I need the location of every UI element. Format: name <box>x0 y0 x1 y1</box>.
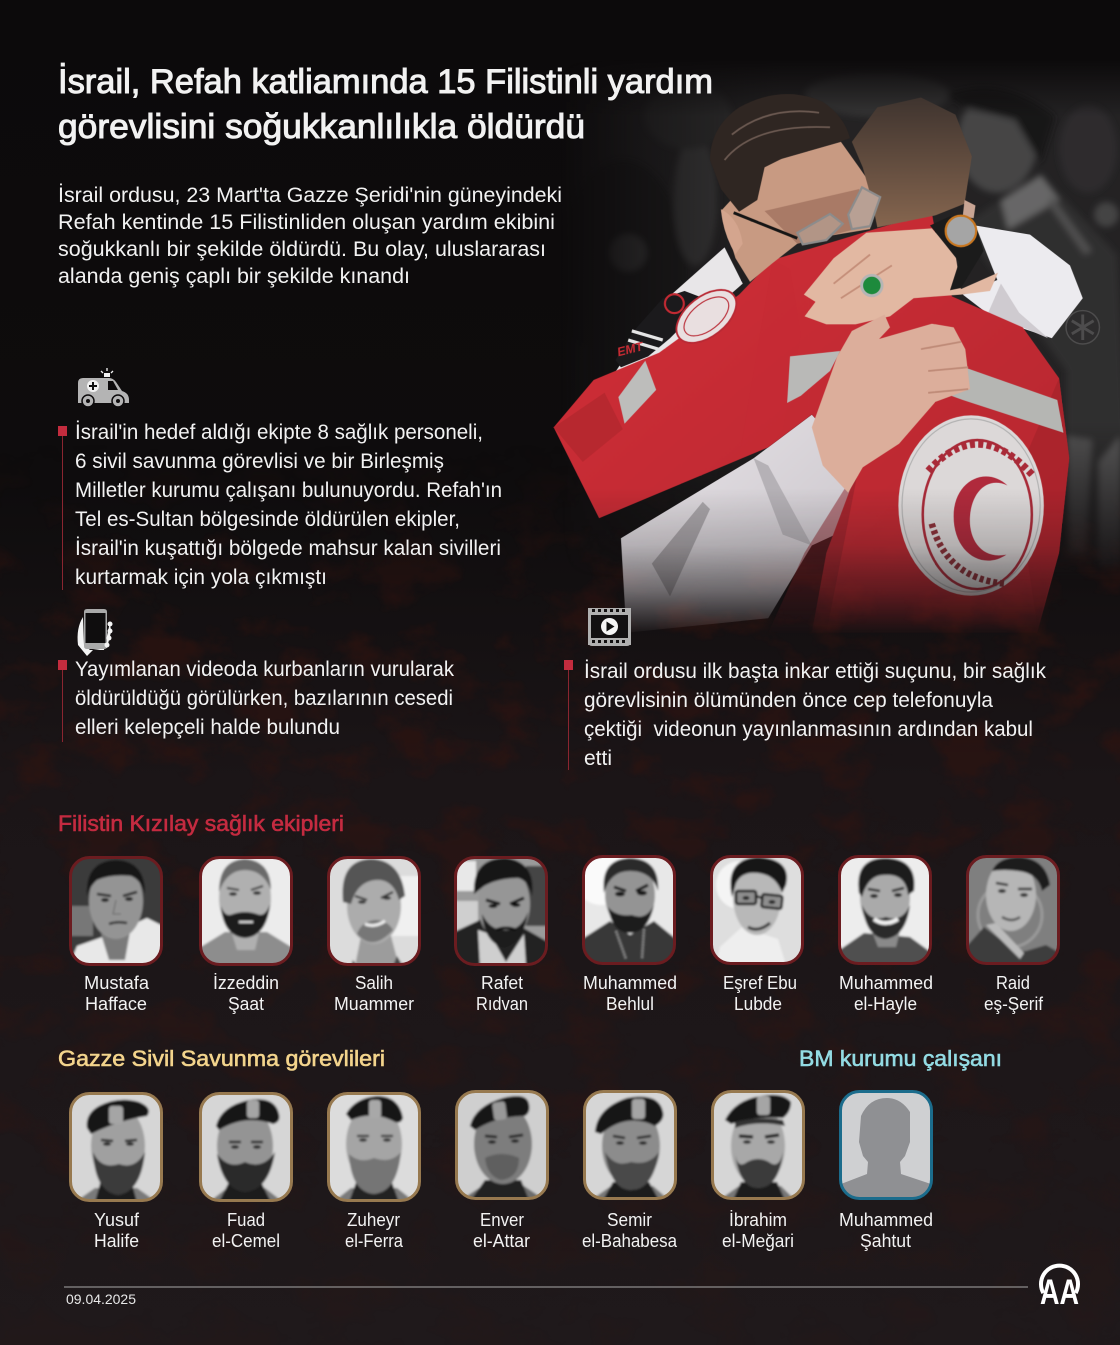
portrait: Zuheyr el-Ferra <box>327 1092 421 1202</box>
portrait: Fuad el-Cemel <box>199 1092 293 1202</box>
name: Mustafa Hafface: Mustafa <box>84 973 150 993</box>
name: Raid eş-Şerif: Raid <box>996 973 1030 993</box>
text block: video evidence <box>75 658 454 739</box>
photo: grey crowd background <box>610 74 1120 562</box>
photo: upper white sleeve <box>963 225 1083 338</box>
text block: target team <box>75 421 502 589</box>
intro paragraph: Refah kentinde 15 Filistinliden oluşan yardım ekibini <box>58 211 555 234</box>
text block: target team: Tel es-Sultan bölgesinde öldürülen ekipler, <box>75 508 460 531</box>
portrait: Muhammed Şahtut (placeholder silhouette) <box>839 1090 933 1200</box>
name: Yusuf Halife: Halife <box>94 1231 139 1251</box>
name: Fuad el-Cemel: el-Cemel <box>212 1231 280 1251</box>
name: İbrahim el-Meğari: İbrahim <box>729 1210 787 1230</box>
name: Muhammed Behlul: Muhammed <box>583 973 677 993</box>
name: İzzeddin Şaat <box>213 973 279 1014</box>
photo: reflective strips <box>787 351 840 403</box>
name: Salih Muammer <box>334 973 414 1014</box>
name: Salih Muammer: Muammer <box>334 994 414 1014</box>
photo: ring <box>862 275 882 296</box>
photo: man B head <box>852 97 972 227</box>
name: Muhammed el-Hayle <box>839 973 933 1014</box>
name: Semir el-Bahabesa: el-Bahabesa <box>582 1231 678 1251</box>
date: 09.04.2025 <box>66 1291 136 1307</box>
icon: ambulance <box>78 368 129 407</box>
bullet: video block marker <box>58 660 67 742</box>
intro paragraph: İsrail ordusu, 23 Mart'ta Gazze Şeridi'nin güneyindeki <box>58 184 562 207</box>
name: İbrahim el-Meğari <box>722 1210 794 1251</box>
name: Eşref Ebu Lubde <box>723 973 797 1014</box>
portrait: Muhammed el-Hayle <box>838 855 932 965</box>
name: Muhammed Şahtut: Şahtut <box>860 1231 911 1251</box>
title: görevlisini soğukkanlılıkla öldürdü <box>58 108 585 146</box>
portrait: Raid eş-Şerif <box>966 855 1060 965</box>
photo: man A hair <box>710 94 850 212</box>
name: Raid eş-Şerif <box>984 973 1044 1014</box>
photo: man A head <box>721 142 879 282</box>
logo: Anadolu Agency: AA <box>1040 1273 1079 1312</box>
photo: glasses <box>734 213 797 238</box>
name: Muhammed el-Hayle: Muhammed <box>839 973 933 993</box>
name: Eşref Ebu Lubde: Eşref Ebu <box>723 973 797 993</box>
photo: watch <box>930 216 983 290</box>
name: Fuad el-Cemel: Fuad <box>227 1210 265 1230</box>
text block: target team: 6 sivil savunma görevlisi ve bir Birleşmiş <box>75 450 444 473</box>
heading: UN employee: BM kurumu çalışanı <box>799 1046 1002 1071</box>
intro paragraph: alanda geniş çaplı bir şekilde kınandı <box>58 265 410 288</box>
name: Muhammed el-Hayle: el-Hayle <box>854 994 917 1014</box>
portrait: Mustafa Hafface <box>69 856 163 966</box>
photo: two main figures: EMT <box>616 339 646 359</box>
name: Zuheyr el-Ferra: el-Ferra <box>345 1231 404 1251</box>
photo: lower white sleeve <box>621 415 863 633</box>
name: Zuheyr el-Ferra <box>345 1210 404 1251</box>
name: Mustafa Hafface: Hafface <box>85 994 147 1014</box>
name: Yusuf Halife <box>94 1210 140 1251</box>
logo: Anadolu Agency <box>1040 1266 1079 1312</box>
title <box>58 63 713 146</box>
text block: admission: görevlisinin ölümünden önce cep telefonuyla <box>584 689 993 712</box>
intro paragraph <box>58 184 562 288</box>
name: Eşref Ebu Lubde: Lubde <box>734 994 782 1014</box>
name: Enver el-Attar: el-Attar <box>473 1231 530 1251</box>
name: Rafet Rıdvan: Rafet <box>481 973 523 993</box>
portrait: Muhammed Behlul <box>582 855 676 965</box>
name: Semir el-Bahabesa <box>582 1210 678 1251</box>
name: Muhammed Şahtut: Muhammed <box>839 1210 933 1230</box>
bullet: admission block marker <box>564 660 573 770</box>
name: Enver el-Attar <box>473 1210 530 1251</box>
name: Zuheyr el-Ferra: Zuheyr <box>347 1210 400 1230</box>
photo: upper hand <box>804 228 998 324</box>
intro paragraph: soğukkanlı bir şekilde öldürdü. Bu olay, uluslararası <box>58 238 546 261</box>
portrait: Semir el-Bahabesa <box>583 1090 677 1200</box>
text block: admission: İsrail ordusu ilk başta inkar ettiği suçunu, bir sağlık <box>584 660 1046 683</box>
name: İzzeddin Şaat: İzzeddin <box>213 973 279 993</box>
icon: film with play button <box>588 608 631 645</box>
text block: video evidence: elleri kelepçeli halde bulundu <box>75 716 340 739</box>
name: Rafet Rıdvan: Rıdvan <box>476 994 528 1014</box>
text block: video evidence: Yayımlanan videoda kurbanların vurularak <box>75 658 454 681</box>
photo: back crescent patch <box>898 415 1044 596</box>
name: Muhammed Şahtut <box>839 1210 933 1251</box>
name: İzzeddin Şaat: Şaat <box>228 994 264 1014</box>
text block: video evidence: öldürüldüğü görülürken, bazılarının cesedi <box>75 687 453 710</box>
photo: lower hand and forearm <box>812 315 970 493</box>
portrait: Rafet Rıdvan <box>454 856 548 966</box>
name: Rafet Rıdvan <box>476 973 528 1014</box>
portrait: Yusuf Halife <box>69 1092 163 1202</box>
name: Muhammed Behlul <box>583 973 677 1014</box>
photo: sleeve crescent patch <box>675 288 737 344</box>
text block: target team: İsrail'in hedef aldığı ekipte 8 sağlık personeli, <box>75 421 483 444</box>
text block: target team: Milletler kurumu çalışanı bulunuyordu. Refah'ın <box>75 479 502 502</box>
heading: Gaza Civil Defense: Gazze Sivil Savunma görevlileri <box>58 1046 385 1071</box>
portrait: Eşref Ebu Lubde <box>710 855 804 965</box>
name: Muhammed Behlul: Behlul <box>606 994 654 1014</box>
photo: red jacket <box>554 213 1069 633</box>
heading: Red Crescent health teams: Filistin Kızılay sağlık ekipleri <box>58 811 344 836</box>
name: Raid eş-Şerif: eş-Şerif <box>984 994 1044 1014</box>
photo: white shirt shoulder <box>614 247 743 382</box>
portrait: İbrahim el-Meğari <box>711 1090 805 1200</box>
name: Semir el-Bahabesa: Semir <box>607 1210 652 1230</box>
portrait: Salih Muammer <box>327 856 421 966</box>
text block: admission <box>584 660 1046 770</box>
title: İsrail, Refah katliamında 15 Filistinli yardım <box>58 63 713 101</box>
name: Salih Muammer: Salih <box>355 973 393 993</box>
text block: admission: çektiği videonun yayınlanmasının ardından kabul <box>584 718 1033 741</box>
photo: black armband <box>615 291 708 367</box>
name: Enver el-Attar: Enver <box>480 1210 524 1230</box>
text block: admission: etti <box>584 747 612 770</box>
portrait: İzzeddin Şaat <box>199 856 293 966</box>
icon: phone in hand <box>78 609 112 656</box>
name: Fuad el-Cemel <box>212 1210 280 1251</box>
name: Yusuf Halife: Yusuf <box>94 1210 140 1230</box>
photo: two main figures <box>554 94 1083 633</box>
name: İbrahim el-Meğari: el-Meğari <box>722 1231 794 1251</box>
name: Mustafa Hafface <box>84 973 150 1014</box>
bullet: first text block marker <box>58 426 67 590</box>
portrait: Enver el-Attar <box>455 1090 549 1200</box>
text block: target team: kurtarmak için yola çıkmıştı <box>75 566 327 589</box>
photo: embracing Red Crescent paramedics <box>554 74 1120 632</box>
text block: target team: İsrail'in kuşattığı bölgede mahsur kalan sivilleri <box>75 537 501 560</box>
